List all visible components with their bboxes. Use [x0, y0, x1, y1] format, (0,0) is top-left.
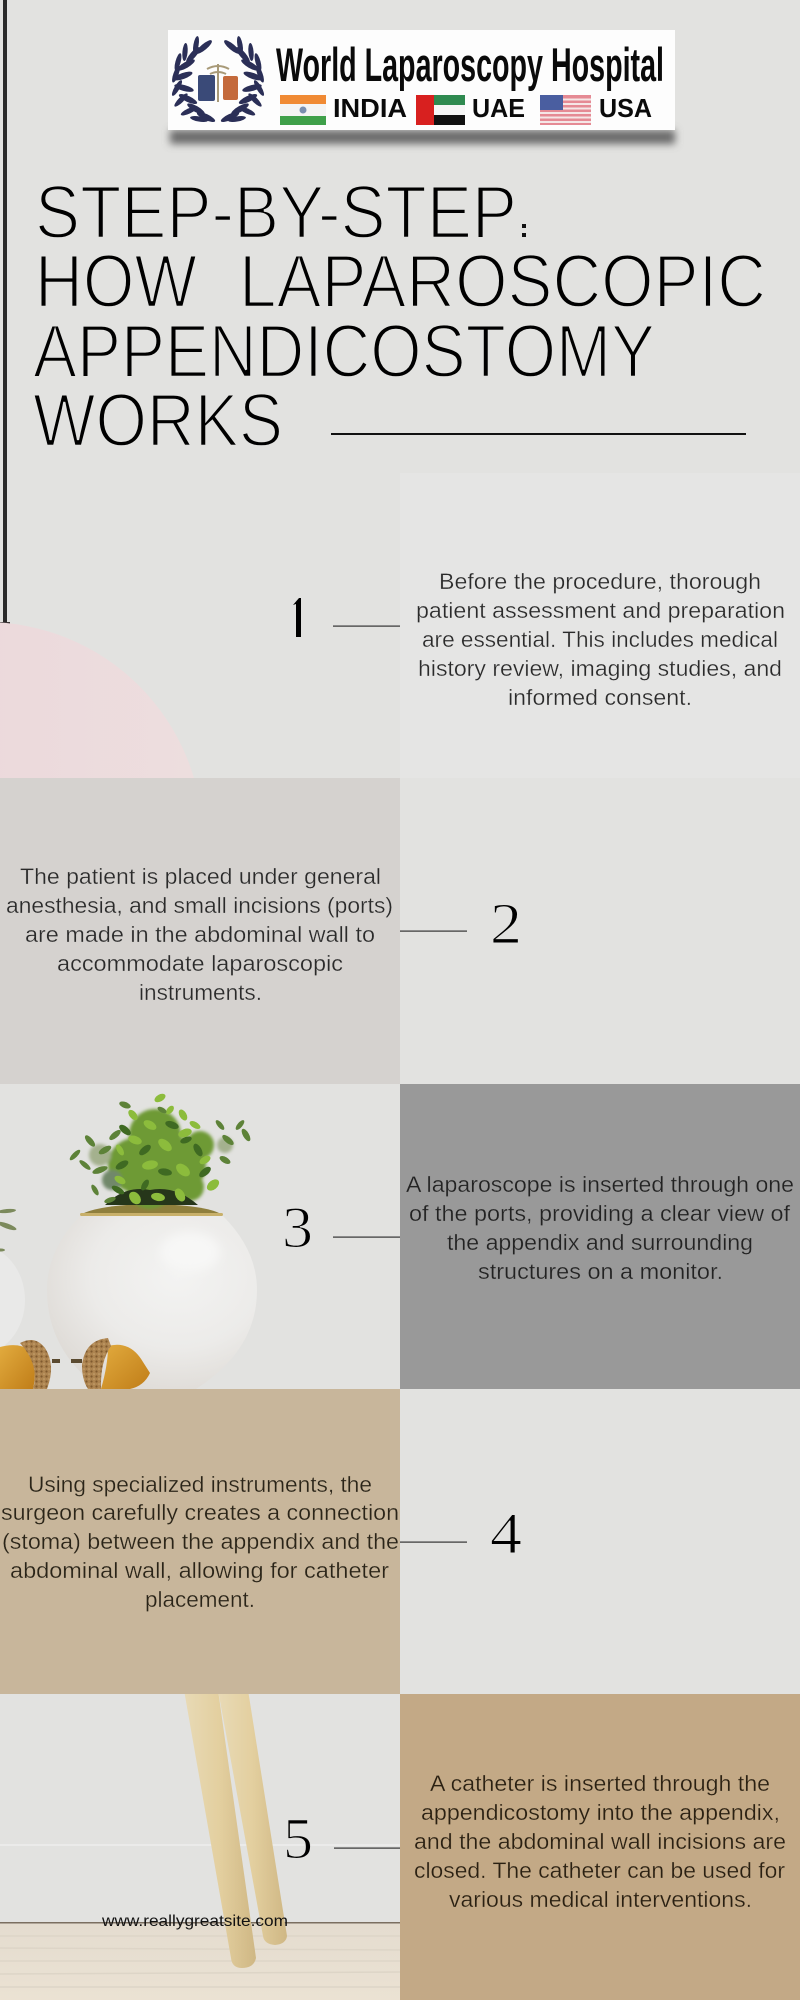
left plant leaves: [0, 1208, 17, 1252]
step 4 text: Using specialized instruments, the: [28, 1472, 372, 1497]
title: WORKS: [33, 378, 283, 462]
step 4 text: [1, 1472, 399, 1612]
step 5 text: appendicostomy into the appendix,: [421, 1800, 780, 1825]
step 2 text: The patient is placed under general: [20, 864, 381, 889]
step 4 number: 4: [490, 1501, 522, 1566]
step 4 connector: [400, 1542, 467, 1543]
floor grain: [0, 1936, 400, 1987]
label USA: USA: [599, 93, 652, 123]
step 1 text: [416, 569, 785, 710]
step 3 text: [406, 1172, 794, 1284]
step 1 number: [293, 598, 301, 637]
back wooden leg: [218, 1690, 287, 1945]
step 3 number: 3: [282, 1195, 313, 1260]
step 2 connector: [400, 930, 467, 932]
step 3 text: of the ports, providing a clear view of: [409, 1201, 791, 1226]
step 4 text: placement.: [145, 1587, 255, 1612]
front wooden leg: [184, 1690, 256, 1968]
step 5 text: [414, 1771, 786, 1912]
label INDIA: INDIA: [333, 93, 407, 123]
step 3 text: structures on a monitor.: [478, 1259, 723, 1284]
step 3 text: the appendix and surrounding: [447, 1230, 753, 1255]
panel: step 5 image (wood legs on floor): [0, 1690, 400, 2000]
step 3 connector: [333, 1236, 400, 1238]
logo banner: [168, 30, 675, 144]
logo white plate: [168, 30, 675, 130]
step 2 number: 2: [490, 891, 522, 956]
step 1 text: are essential. This includes medical: [422, 627, 778, 652]
icon: laurel wreath crest: [170, 36, 266, 124]
step 2 text: instruments.: [139, 980, 262, 1005]
panel: step 1 text background: [400, 473, 800, 778]
flag: USA: [540, 95, 591, 125]
logo shadow: [170, 130, 675, 144]
floor: [0, 1923, 400, 2000]
step 1 text: history review, imaging studies, and: [418, 656, 782, 681]
white round pot: [47, 1216, 257, 1389]
skirting floor line: [0, 1922, 400, 1924]
foliage: [68, 1092, 252, 1209]
panel: step 3 image (potted plant and acorns): [0, 1092, 257, 1389]
title rule: [331, 433, 746, 435]
panel: step 3 text background: [400, 1084, 800, 1389]
panel: step 4 text background: [0, 1389, 400, 1694]
panel: step 1 image (pink lamp): [0, 622, 194, 778]
flag: UAE: [416, 95, 465, 125]
step 4 text: abdominal wall, allowing for catheter: [10, 1558, 389, 1583]
wall skirting highlight: [0, 1844, 400, 1846]
hanging lamp cord: [0, 0, 10, 630]
panel: step 2 text background: [0, 778, 400, 1084]
title: [33, 170, 766, 462]
step 2 text: [6, 864, 393, 1005]
flag: India: [280, 95, 326, 125]
step 1 text: informed consent.: [508, 685, 692, 710]
step 4 text: (stoma) between the appendix and the: [2, 1529, 399, 1554]
step 5 text: various medical interventions.: [449, 1887, 752, 1912]
panel: step 5 text background: [400, 1694, 800, 2000]
step 5 text: A catheter is inserted through the: [430, 1771, 770, 1796]
step 5 text: closed. The catheter can be used for: [414, 1858, 785, 1883]
step 2 text: anesthesia, and small incisions (ports): [6, 893, 393, 918]
gold rim: [81, 1204, 222, 1216]
acorn left: [0, 1340, 60, 1389]
title: STEP-BY-STEP: [35, 170, 517, 254]
acorn right: [71, 1338, 150, 1389]
step 5 connector: [334, 1848, 400, 1849]
step 1 text: Before the procedure, thorough: [439, 569, 761, 594]
step 3 text: A laparoscope is inserted through one: [406, 1172, 794, 1197]
step 1 connector: [333, 626, 400, 627]
pot highlight: [175, 1237, 214, 1256]
website url: www.reallygreatsite.com: [101, 1913, 288, 1930]
title: APPENDICOSTOMY: [33, 309, 655, 393]
step 2 text: are made in the abdominal wall to: [25, 922, 375, 947]
step 1 text: patient assessment and preparation: [416, 598, 785, 623]
step 5 text: and the abdominal wall incisions are: [414, 1829, 786, 1854]
step 4 text: surgeon carefully creates a connection: [1, 1500, 399, 1525]
step 2 text: accommodate laparoscopic: [57, 951, 343, 976]
title: HOW: [35, 239, 197, 323]
step 5 number: 5: [283, 1806, 313, 1871]
label UAE: UAE: [472, 93, 525, 123]
second pot at left edge: [0, 1245, 25, 1355]
